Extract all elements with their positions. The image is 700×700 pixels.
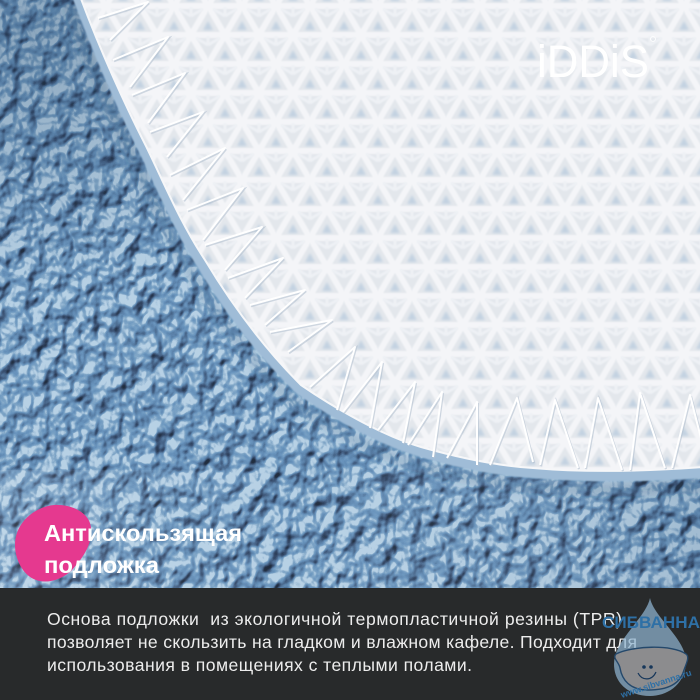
- hem shadow on the pile: [66, 0, 700, 489]
- stitch shadows: [99, 3, 700, 471]
- bathtub: [615, 647, 688, 690]
- bath face: [638, 665, 656, 679]
- overlock edge thread: [80, 0, 700, 471]
- site url: www.sibvanna.ru: [619, 668, 693, 700]
- panel: white anti-slip backing with stitched hem: [66, 0, 700, 489]
- description text: позволяет не скользить на гладком и влажном кафеле. Подходит для: [47, 632, 637, 652]
- zigzag stitches: [98, 2, 700, 470]
- water drop: [614, 598, 686, 696]
- description text: Основа подложки из экологичной термопластичной резины (TPR): [47, 609, 622, 629]
- logo: iddis: iDDiS: [537, 36, 649, 87]
- blue hem edge: [72, 0, 700, 481]
- mat surface texture: [80, 0, 700, 471]
- brand name: СИБВАННА: [602, 613, 700, 632]
- watermark: sibvanna drop and bath: [602, 598, 700, 700]
- panel: dark caption band: [0, 588, 700, 700]
- heading: подложка: [44, 552, 159, 578]
- badge: pink blob: [15, 505, 91, 582]
- description text: использования в помещениях с теплыми полами.: [47, 655, 472, 675]
- heading: Антискользящая: [44, 520, 242, 546]
